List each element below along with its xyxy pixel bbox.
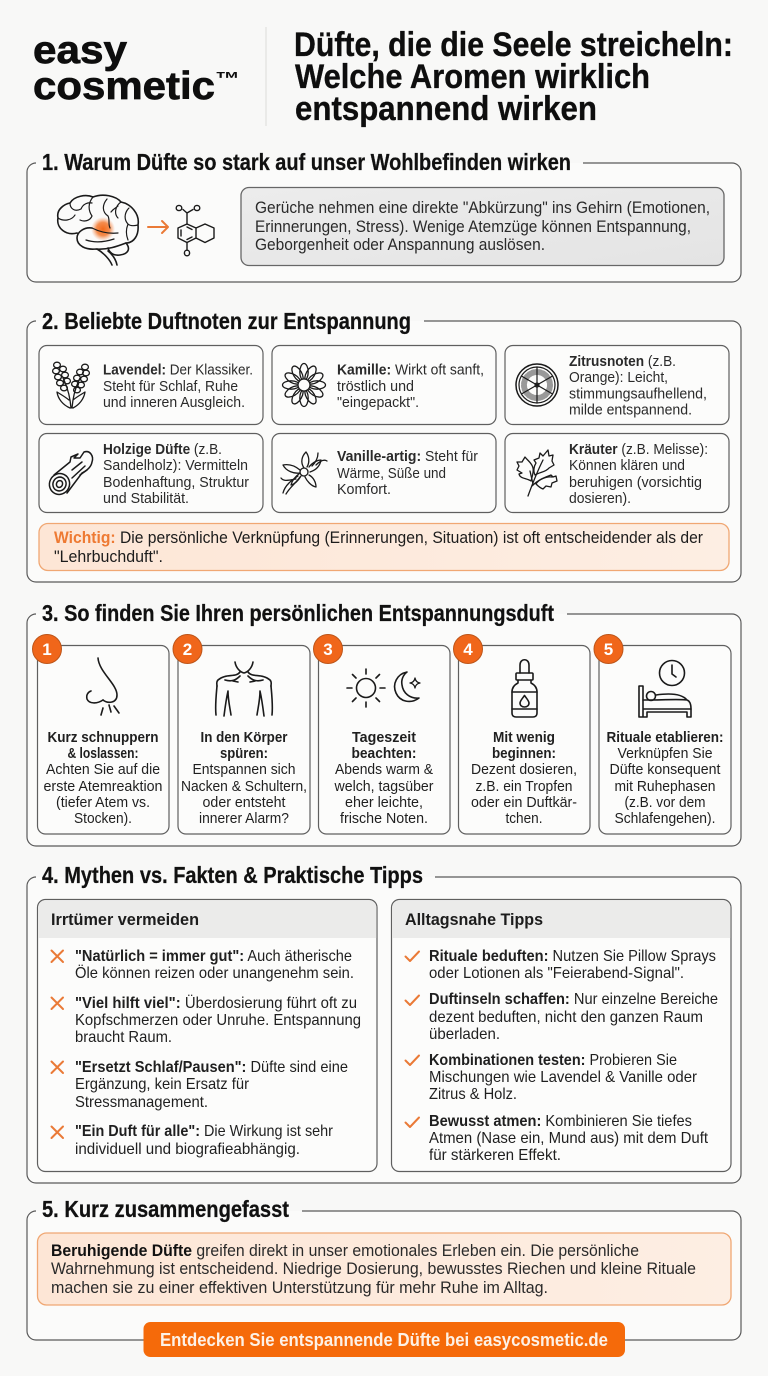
text: Kräuter: Kräuter (z.B. Melisse): xyxy=(569,441,708,458)
text: step 2 xyxy=(181,730,307,827)
icon: herb xyxy=(517,450,557,496)
text: step 3: welch, tagsüber xyxy=(334,779,434,795)
tip 1: oder Lotionen als "Feierabend-Signal". xyxy=(429,965,684,982)
panel: section 3 xyxy=(27,600,741,846)
title xyxy=(294,26,733,128)
text: Vanille: Komfort. xyxy=(337,481,391,498)
myth 2 xyxy=(52,994,361,1046)
text: step 5: (z.B. vor dem xyxy=(624,795,706,811)
text: Kräuter xyxy=(569,441,708,507)
tip 3: Kombinationen testen: Probieren Sie xyxy=(429,1052,677,1069)
heading: section 1: 1. Warum Düfte so stark auf unser Wohlbefinden wirken xyxy=(42,149,571,175)
icon: vanilla flower xyxy=(281,452,327,494)
logo: ™ xyxy=(215,69,240,90)
panel: Irrtümer vermeiden xyxy=(38,900,377,1172)
myth 4: "Ein Duft für alle": Die Wirkung ist sehr xyxy=(75,1123,333,1140)
icon: neck and shoulders xyxy=(216,662,272,716)
icon: bed and clock xyxy=(639,660,691,717)
card: Kamille xyxy=(272,346,496,424)
text: Kamille: tröstlich und xyxy=(337,378,414,395)
text: step 3: Tageszeit xyxy=(352,730,416,746)
text: step 2: Entspannen sich xyxy=(192,762,296,778)
myth 3 xyxy=(52,1059,348,1111)
text: step 5: Schlafengehen). xyxy=(614,811,716,827)
badge 5: 5 xyxy=(604,640,613,659)
subheading: Tipps: Alltagsnahe Tipps xyxy=(405,910,543,929)
text: Kamille: Kamille: Wirkt oft sanft, xyxy=(337,362,484,378)
text: Vanille: Wärme, Süße und xyxy=(337,465,446,482)
text: step 5: Verknüpfen Sie xyxy=(618,746,712,762)
text: step 4 xyxy=(471,730,577,827)
text: Lavendel: und inneren Ausgleich. xyxy=(103,394,245,411)
text: Lavendel: Lavendel: Der Klassiker. xyxy=(103,362,253,378)
myth 2: braucht Raum. xyxy=(75,1029,172,1046)
tip 2: Duftinseln schaffen: Nur einzelne Bereiche xyxy=(429,991,718,1008)
step 5 xyxy=(594,634,731,834)
text: step 4: Mit wenig xyxy=(493,730,555,746)
text: step 4: z.B. ein Tropfen xyxy=(476,779,572,795)
step 4 xyxy=(454,634,590,834)
tip 4 xyxy=(406,1113,709,1164)
badge 2 xyxy=(173,634,202,664)
text: Zitrusnoten: milde entspannend. xyxy=(569,402,692,418)
button: call to action xyxy=(144,1322,625,1357)
text: step 4: Dezent dosieren, xyxy=(471,762,577,778)
text: Kräuter: dosieren). xyxy=(569,490,631,507)
text: Lavendel xyxy=(103,362,253,411)
icon: nose xyxy=(87,658,119,715)
text: step 1: Stocken). xyxy=(74,811,132,827)
title: Welche Aromen wirklich xyxy=(295,58,650,96)
tip 3: Zitrus & Holz. xyxy=(429,1086,517,1103)
text: Kamille: "eingepackt". xyxy=(337,394,419,411)
tip 4: für stärkeren Effekt. xyxy=(429,1147,561,1164)
text: step 2: In den Körper xyxy=(200,730,288,746)
icon: brain with glow xyxy=(58,195,138,265)
text: Holzige xyxy=(103,441,249,507)
text box: intro: Erinnerungen, Stress). Wenige Atemzüge können Entspannung, xyxy=(255,218,691,236)
text: step 4: beginnen: xyxy=(492,746,556,762)
callout: summary: Wahrnehmung ist entscheidend. Niedrige Dosierung, bewusstes Riechen und kleine Rituale xyxy=(51,1260,696,1278)
card: Kräuter xyxy=(505,434,729,512)
text: step 1: (tiefer Atem vs. xyxy=(56,795,150,811)
card: Zitrusnoten xyxy=(505,346,729,424)
text box: intro xyxy=(241,188,724,266)
text: step 1: Achten Sie auf die xyxy=(46,762,160,778)
tip 1 xyxy=(406,948,716,982)
tip 2: dezent beduften, nicht den ganzen Raum xyxy=(429,1009,703,1026)
tip 2: überladen. xyxy=(429,1026,500,1043)
text: Zitrusnoten: stimmungsaufhellend, xyxy=(569,386,707,402)
tip 3 xyxy=(406,1052,697,1103)
callout: summary xyxy=(38,1233,731,1305)
icon: chamomile xyxy=(282,364,326,406)
panel: section 5 xyxy=(27,1196,741,1357)
text: Zitrusnoten: Orange): Leicht, xyxy=(569,369,668,386)
subheading: Irrtümer: Irrtümer vermeiden xyxy=(51,910,199,929)
text: Kräuter: beruhigen (vorsichtig xyxy=(569,474,702,491)
callout: Wichtig: "Lehrbuchduft". xyxy=(54,548,163,566)
tip 3: Mischungen wie Lavendel & Vanille oder xyxy=(429,1069,697,1086)
myth 3: "Ersetzt Schlaf/Pausen": Düfte sind eine xyxy=(75,1059,348,1076)
tip 1: Rituale beduften: Nutzen Sie Pillow Sprays xyxy=(429,948,716,965)
myth 1: "Natürlich = immer gut": Auch ätherische xyxy=(75,948,352,965)
text: Zitrusnoten xyxy=(569,353,707,418)
text: step 2: innerer Alarm? xyxy=(199,811,289,827)
text: step 1: erste Atemreaktion xyxy=(44,779,162,795)
myth 1: Öle können reizen oder unangenehm sein. xyxy=(75,964,354,982)
tip 4: Atmen (Nase ein, Mund aus) mit dem Duft xyxy=(429,1130,709,1147)
text: Holzige: Bodenhaftung, Struktur xyxy=(103,474,249,491)
text: step 1 xyxy=(44,730,162,827)
logo: cosmetic xyxy=(33,65,215,108)
text: Kamille xyxy=(337,362,484,411)
text: step 1: & loslassen: xyxy=(68,746,138,762)
callout: summary: machen sie zu einer effektiven Unterstützung für mehr Ruhe im Alltag. xyxy=(51,1279,548,1297)
text: step 5: mit Ruhephasen xyxy=(614,779,716,795)
step 1 xyxy=(32,634,169,834)
text: step 4: oder ein Duftkär- xyxy=(471,795,577,811)
myth 3: Stressmanagement. xyxy=(75,1094,208,1111)
myth 4: individuell und biografieabhängig. xyxy=(75,1141,300,1158)
panel: section 2 xyxy=(27,308,741,582)
badge 4: 4 xyxy=(463,640,473,659)
panel: Alltagsnahe Tipps xyxy=(392,900,731,1172)
myth 4 xyxy=(52,1123,333,1158)
panel: section 4 xyxy=(27,862,741,1183)
badge 3 xyxy=(314,634,342,664)
text: step 2: oder entsteht xyxy=(202,795,286,811)
card: Vanille xyxy=(272,434,496,512)
tip 2 xyxy=(406,991,718,1043)
badge 4 xyxy=(454,634,482,664)
button: call to action: Entdecken Sie entspannende Düfte bei easycosmetic.de xyxy=(160,1329,608,1350)
text: Kräuter: Können klären und xyxy=(569,457,685,474)
step 2 xyxy=(173,634,310,834)
badge 5 xyxy=(594,634,623,664)
text: Vanille xyxy=(337,448,478,498)
logo xyxy=(33,29,240,108)
text: step 4: tchen. xyxy=(506,811,542,827)
text: Holzige: und Stabilität. xyxy=(103,490,189,507)
callout: Wichtig: Wichtig: Die persönliche Verknüpfung (Erinnerungen, Situation) ist oft entscheidender als der xyxy=(54,529,703,547)
arrow xyxy=(148,221,168,233)
heading: section 4: 4. Mythen vs. Fakten & Praktische Tipps xyxy=(42,862,423,888)
badge 1: 1 xyxy=(42,640,52,659)
text: step 3: eher leichte, xyxy=(345,795,423,811)
callout: summary: Beruhigende Düfte greifen direkt in unser emotionales Erleben ein. Die persönliche xyxy=(51,1242,639,1260)
panel: section 1 xyxy=(27,149,741,282)
myth 1 xyxy=(52,948,354,982)
text: step 3: beachten: xyxy=(352,746,416,762)
text: Zitrusnoten: Zitrusnoten (z.B. xyxy=(569,353,676,370)
logo: easy xyxy=(33,29,127,72)
text box: intro: Geborgenheit oder Anspannung auslösen. xyxy=(255,236,545,254)
text: Lavendel: Steht für Schlaf, Ruhe xyxy=(103,378,238,395)
myth 2: Kopfschmerzen oder Unruhe. Entspannung xyxy=(75,1012,361,1029)
text: Holzige: Sandelholz): Vermitteln xyxy=(103,457,248,474)
text: Vanille: Vanille-artig: Steht für xyxy=(337,448,478,465)
text: step 1: Kurz schnuppern xyxy=(48,730,159,746)
card: Lavendel xyxy=(39,346,263,424)
icon: dropper bottle xyxy=(512,660,537,717)
tip 4: Bewusst atmen: Kombinieren Sie tiefes xyxy=(429,1113,692,1130)
badge 1 xyxy=(32,634,62,664)
icon: lavender xyxy=(53,362,89,408)
myth 2: "Viel hilft viel": Überdosierung führt oft zu xyxy=(75,994,357,1012)
badge 3: 3 xyxy=(323,640,333,659)
icon: molecule xyxy=(176,205,214,256)
badge 2: 2 xyxy=(183,640,192,659)
icon: wood log xyxy=(46,452,93,498)
text: Holzige: Holzige Düfte (z.B. xyxy=(103,441,222,458)
heading: section 5: 5. Kurz zusammengefasst xyxy=(42,1196,289,1222)
icon: citrus slice xyxy=(516,364,558,406)
text: step 5 xyxy=(606,730,724,827)
heading: section 3: 3. So finden Sie Ihren persönlichen Entspannungsduft xyxy=(42,600,554,626)
card: Holzige Düfte xyxy=(39,434,263,512)
text: step 3 xyxy=(334,730,434,827)
myth 3: Ergänzung, kein Ersatz für xyxy=(75,1076,249,1093)
step 3 xyxy=(314,634,450,834)
text box: intro: Gerüche nehmen eine direkte "Abkürzung" ins Gehirn (Emotionen, xyxy=(255,199,710,217)
text: step 3: frische Noten. xyxy=(340,811,428,827)
text: step 3: Abends warm & xyxy=(335,762,433,778)
text: step 2: spüren: xyxy=(220,746,268,762)
text: step 5: Rituale etablieren: xyxy=(606,730,724,746)
callout: Wichtig xyxy=(39,524,729,570)
text: step 2: Nacken & Schultern, xyxy=(181,779,307,795)
text: step 5: Düfte konsequent xyxy=(610,762,720,778)
title: entspannend wirken xyxy=(295,90,597,128)
icon: sun and moon xyxy=(347,669,420,707)
heading: section 2: 2. Beliebte Duftnoten zur Entspannung xyxy=(42,308,411,334)
